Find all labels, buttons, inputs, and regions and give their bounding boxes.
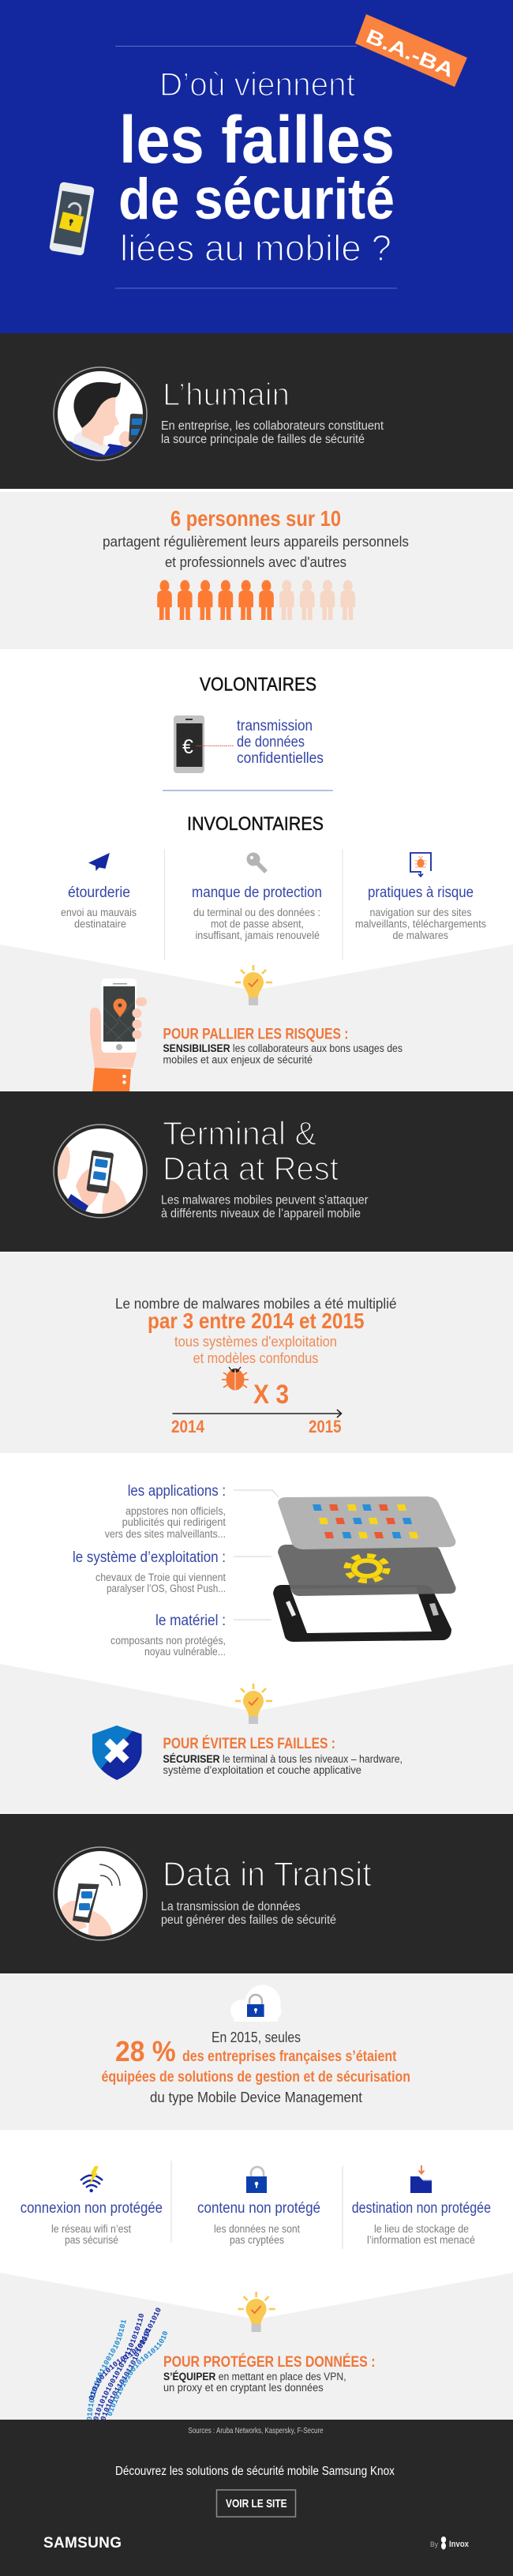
stat text: partagent régulièrement leurs appareils personnels: [103, 533, 409, 550]
button: [216, 2490, 295, 2517]
panel: footer: [0, 2420, 513, 2576]
stat note: et modèles confondus: [193, 1350, 318, 1366]
stat note: tous systèmes d'exploitation: [174, 1334, 337, 1350]
column: contenu non protégé: pas cryptées: [230, 2234, 284, 2246]
subtitle: Les malwares mobiles peuvent s’attaquer: [161, 1194, 368, 1207]
panel: section header L'humain: [0, 333, 513, 489]
label: les applications: les applications :: [128, 1483, 226, 1500]
icon: open padlock: [246, 2167, 267, 2193]
stat value: 28 %: [115, 2035, 176, 2067]
heading: INVOLONTAIRES: [187, 813, 324, 835]
tip text: SÉCURISER le terminal à tous les niveaux – hardware,: [163, 1753, 403, 1765]
label: les applications: appstores non officiels,: [125, 1505, 226, 1517]
column: connexion non protégée: [21, 2166, 163, 2246]
label: le système d'exploitation: le système d’exploitation :: [73, 1549, 226, 1566]
panel: volontaires: [174, 674, 324, 773]
subtitle: [161, 1194, 368, 1221]
pictogram: ten people: [157, 580, 355, 620]
label: le système d'exploitation: [73, 1549, 226, 1594]
stat text: et professionnels avec d'autres: [165, 554, 346, 570]
icon: wifi with lightning: [81, 2166, 103, 2192]
panel: involontaires: [61, 813, 486, 960]
icon: shield: [92, 1725, 142, 1780]
year 2015: 2015: [309, 1417, 341, 1436]
column: pratiques à risque: [355, 853, 486, 941]
icon: phone with euro: €: [182, 736, 193, 758]
tip text: un proxy et en cryptant les données: [163, 2382, 324, 2394]
button: VOIR LE SITE: [226, 2497, 287, 2510]
column: pratiques à risque: navigation sur des sites: [369, 907, 472, 918]
subtitle: La transmission de données: [161, 1900, 301, 1913]
column: manque de protection: mot de passe absent,: [211, 918, 304, 930]
illustration: binary streams: 010101010101100101010101110101: [87, 2320, 126, 2420]
layer: applications: [278, 1496, 455, 1549]
icon: key: [246, 853, 266, 872]
timeline arrow: [172, 1410, 341, 1418]
panel: pour éviter les failles: [0, 1664, 513, 1813]
column: étourderie: envoi au mauvais: [61, 907, 137, 918]
panel: malware stat: [0, 1253, 513, 1453]
icon: light bulb: [235, 965, 272, 1005]
icon: cloud with padlock: [230, 1985, 281, 2022]
column: destination non protégée: [352, 2165, 491, 2246]
column: destination non protégée: destination non protégée: [352, 2200, 491, 2217]
icon: phone with euro: [174, 715, 204, 773]
tip text: mobiles et aux enjeux de sécurité: [163, 1053, 313, 1066]
tip heading: POUR PROTÉGER LES DONNÉES :: [163, 2353, 376, 2371]
subtitle: peut générer des failles de sécurité: [161, 1913, 336, 1927]
icon: bug: [222, 1367, 249, 1391]
stat highlight: des entreprises françaises s’étaient: [182, 2048, 397, 2065]
illustration: binary streams: 0101010100101010110101011010: [93, 2314, 144, 2420]
stat heading: par 3 entre 2014 et 2015: [148, 1309, 365, 1333]
label: les applications: vers des sites malveillants...: [105, 1528, 226, 1540]
stat text: [103, 533, 409, 570]
stat note: du type Mobile Device Management: [150, 2089, 362, 2105]
label: le système d'exploitation: chevaux de Troie qui viennent: [95, 1572, 226, 1583]
label: le matériel: le matériel :: [155, 1613, 226, 1629]
tip text: S’ÉQUIPER en mettant en place des VPN,: [163, 2371, 346, 2383]
icon: light bulb: [235, 1684, 272, 1724]
icon: phone with signal: [54, 1847, 147, 1940]
credit: by Invox: Invox: [449, 2540, 470, 2549]
label: le matériel: composants non protégés,: [110, 1635, 226, 1647]
tip text: [163, 1753, 403, 1776]
icon: hand holding phone: [90, 978, 147, 1091]
icon: light bulb: [238, 2292, 275, 2332]
layer: phone hardware: [273, 1585, 451, 1642]
credit: by Invox: [430, 2537, 470, 2549]
heading: VOLONTAIRES: [200, 674, 316, 695]
illustration: binary streams: 0101001010101101010101: [88, 2329, 150, 2400]
illustration: binary streams: 0101010101001010101101011010: [107, 2331, 167, 2416]
column: étourderie: [61, 853, 137, 930]
column: manque de protection: insuffisant, jamais renouvelé: [196, 929, 320, 941]
subtitle: la source principale de failles de sécurité: [161, 433, 365, 446]
column: connexion non protégée: pas sécurisé: [65, 2234, 118, 2246]
column: étourderie: destinataire: [74, 918, 126, 930]
title: line 4: liées au mobile ?: [120, 227, 391, 268]
icon: man using phone: [54, 367, 150, 466]
subtitle: à différents niveaux de l’appareil mobile: [161, 1207, 361, 1221]
tip heading: POUR ÉVITER LES FAILLES :: [163, 1735, 335, 1752]
logo: Samsung: SAMSUNG: [43, 2535, 122, 2552]
panel: pour pallier les risques: [0, 944, 513, 1091]
column: manque de protection: manque de protection: [192, 884, 322, 901]
panel: attack levels: [73, 1483, 456, 1658]
label: le matériel: noyau vulnérable...: [144, 1646, 226, 1658]
column: destination non protégée: le lieu de stockage de: [374, 2223, 469, 2235]
column: pratiques à risque: malveillants, téléchargements: [355, 918, 486, 930]
panel: three transit risks: [21, 2161, 491, 2249]
icon: folder with arrow: [410, 2165, 432, 2193]
panel: section header Data in Transit: [0, 1814, 513, 1973]
diagram: exploded phone layers: [273, 1496, 456, 1642]
credit: by Invox: By: [430, 2540, 438, 2549]
year 2014: 2014: [171, 1417, 205, 1436]
column: contenu non protégé: [197, 2167, 320, 2246]
panel: section header Terminal & Data at Rest: [0, 1091, 513, 1252]
subtitle: [161, 1900, 336, 1927]
column: manque de protection: [192, 853, 322, 941]
text: confidentielles: [237, 750, 324, 767]
label: B.A.-BA: [355, 14, 467, 87]
sources: Sources : Aruba Networks, Kaspersky, F-Secure: [188, 2426, 324, 2435]
text: transmission: [237, 718, 313, 734]
column: contenu non protégé: les données ne sont: [214, 2223, 300, 2235]
stat heading: 6 personnes sur 10: [170, 506, 341, 531]
title: line 3: de sécurité: [118, 167, 395, 231]
column: étourderie: étourderie: [68, 884, 130, 901]
stat intro: Le nombre de malwares mobiles a été multiplié: [115, 1295, 396, 1312]
layer: operating system: [278, 1545, 456, 1596]
text: de données: [237, 734, 305, 750]
tip text: SENSIBILISER les collaborateurs aux bons usages des: [163, 1042, 403, 1054]
tip text: [163, 1042, 403, 1066]
icon: infected monitor: [410, 853, 431, 877]
title: line 2: les failles: [119, 103, 395, 177]
column: destination non protégée: l’information est menacé: [367, 2234, 475, 2246]
heading: Terminal &: [163, 1115, 316, 1151]
label: le système d'exploitation: paralyser l’OS, Ghost Push...: [107, 1583, 226, 1594]
heading: [163, 1115, 339, 1187]
label: B.A.-BA: B.A.-BA: [363, 25, 457, 82]
subtitle: En entreprise, les collaborateurs constituent: [161, 419, 384, 433]
label: les applications: publicités qui redirigent: [122, 1516, 226, 1528]
label: le matériel: [110, 1613, 226, 1658]
icon: paper plane: [88, 853, 110, 871]
panel: 28 % stat: [0, 1975, 513, 2130]
subtitle: [161, 419, 384, 446]
heading: L’humain: [163, 377, 290, 412]
stat intro: En 2015, seules: [212, 2029, 301, 2045]
tip text: [163, 2371, 346, 2394]
call to action text: Découvrez les solutions de sécurité mobile Samsung Knox: [115, 2465, 395, 2478]
dotted connector: [197, 745, 234, 747]
illustration: binary streams: [87, 2308, 167, 2420]
column: contenu non protégé: contenu non protégé: [197, 2200, 320, 2217]
icon: phone with open padlock: [49, 182, 95, 256]
stat highlight: équipées de solutions de gestion et de sécurisation: [101, 2068, 410, 2086]
heading: Data at Rest: [163, 1150, 339, 1187]
column: connexion non protégée: le réseau wifi n’est: [51, 2223, 131, 2235]
column: manque de protection: du terminal ou des données :: [193, 907, 320, 918]
multiplier: X 3: [253, 1380, 289, 1410]
title: line 1: D’où viennent: [159, 66, 355, 103]
column: connexion non protégée: connexion non protégée: [21, 2200, 163, 2217]
illustration: binary streams: 01010101101011010100101010101010: [101, 2308, 161, 2420]
icon: hands holding phone: [53, 1124, 148, 1219]
tip heading: POUR PALLIER LES RISQUES :: [163, 1027, 349, 1042]
stat note: [174, 1334, 337, 1366]
stat highlight: [101, 2048, 410, 2086]
column: pratiques à risque: de malwares: [393, 929, 448, 941]
panel: hero title: [0, 0, 513, 333]
text: [237, 718, 324, 767]
label: les applications: [105, 1483, 226, 1540]
panel: 6 personnes sur 10: [0, 492, 513, 649]
column: pratiques à risque: pratiques à risque: [368, 884, 474, 901]
tip text: système d’exploitation et couche applicative: [163, 1764, 361, 1776]
heading: Data in Transit: [163, 1855, 372, 1894]
